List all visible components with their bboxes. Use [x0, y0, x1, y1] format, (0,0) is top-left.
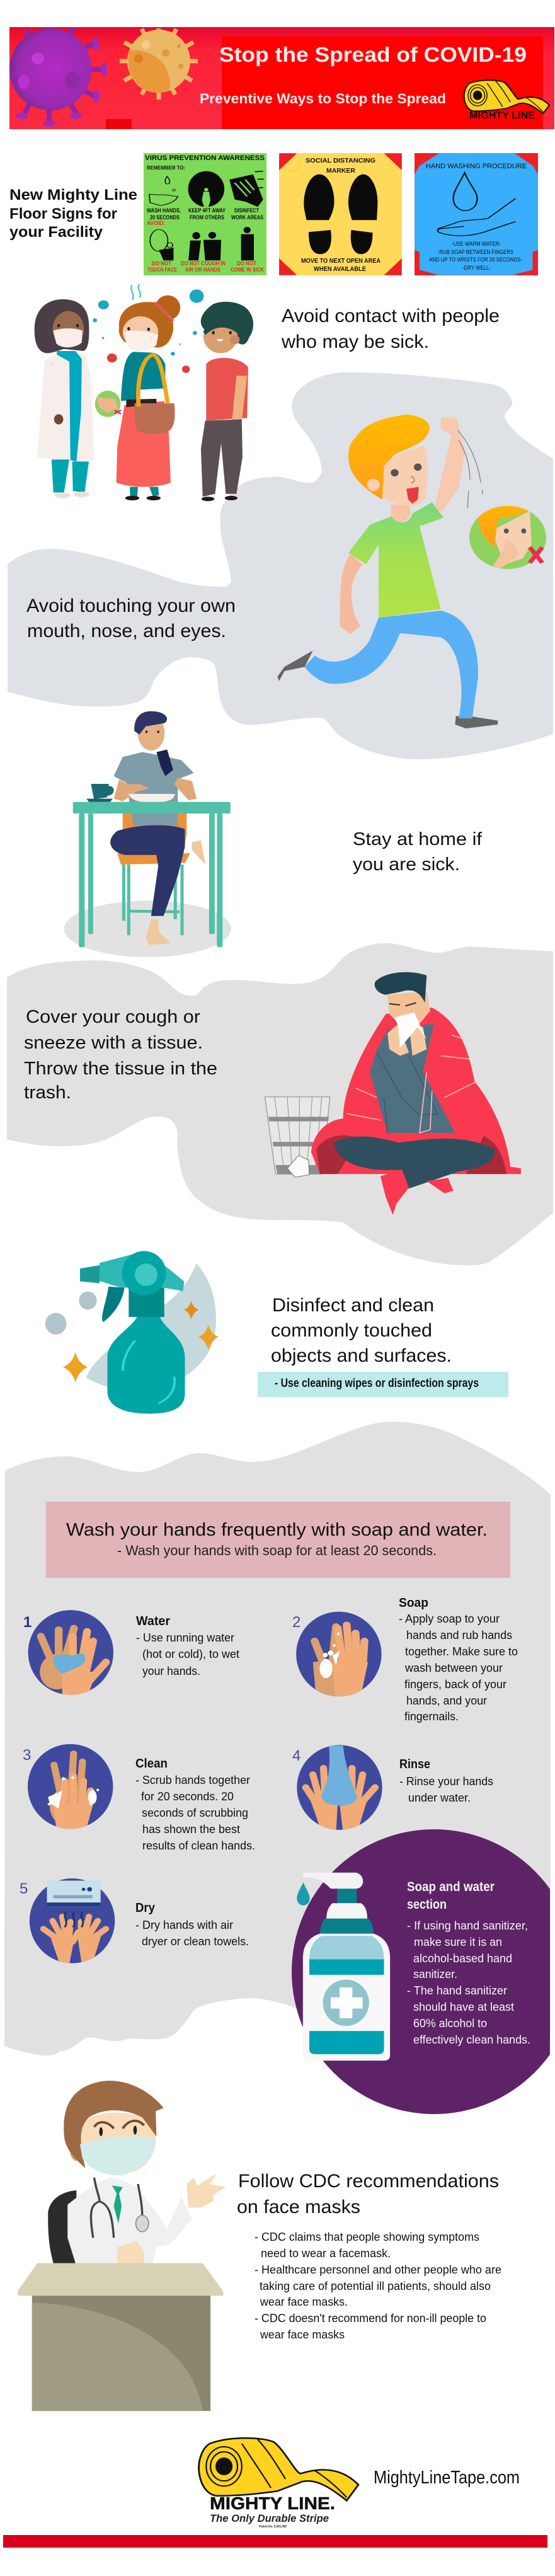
- text: avoid contact: who may be sick.: [281, 331, 429, 352]
- sign text: FROM OTHERS: [190, 214, 224, 221]
- text: disinfect and clean: Disinfect and clean: [272, 1295, 434, 1316]
- text: soap and water section: should have at least: [413, 2000, 514, 2013]
- hands: [50, 1754, 94, 1832]
- head: [122, 1251, 166, 1295]
- sign text: -RUB SOAP BETWEEN FINGERS: [438, 249, 513, 255]
- heading: floor signs: New Mighty Line: [9, 187, 137, 204]
- text: disinfect and clean: commonly touched: [271, 1320, 432, 1341]
- text: soap and water section: make sure it is an: [414, 1935, 502, 1948]
- callout text: - Use cleaning wipes or disinfection sprays: [275, 1377, 479, 1390]
- illustration: doctor at desk: [18, 2081, 226, 2411]
- footer red bar: [3, 2535, 547, 2548]
- icon: step 1 water: [28, 1610, 113, 1704]
- logo wordmark: MIGHTY LINE: [469, 110, 535, 121]
- stethoscope head: [136, 2216, 149, 2232]
- illustration: man at table: [64, 711, 231, 957]
- sign red text: TOUCH FACE: [147, 267, 177, 273]
- cap: [320, 1919, 374, 1935]
- title: Stop the Spread of COVID-19: [219, 43, 527, 66]
- sign background: [415, 153, 538, 275]
- text: step 2 soap: fingernails.: [404, 1710, 459, 1723]
- neck: [391, 502, 411, 522]
- chair: [48, 2190, 76, 2263]
- ear: [70, 2141, 83, 2161]
- sign text: DISINFECT: [234, 207, 259, 214]
- circle: [30, 1878, 115, 1964]
- fist: [117, 2241, 144, 2271]
- neck: [129, 1288, 164, 1317]
- shirt: [348, 502, 443, 618]
- blanket: [311, 1008, 521, 1174]
- heading: Wash your hands frequently with soap and water.: [66, 1520, 488, 1540]
- text: step 2 soap: [399, 1596, 518, 1723]
- head: [137, 715, 164, 750]
- bubbles: [45, 1292, 97, 1335]
- icon: step 3 clean: [28, 1744, 113, 1832]
- text: avoid contact: Avoid contact with people: [282, 306, 500, 326]
- legs: [110, 825, 185, 916]
- running water: [321, 1745, 357, 1806]
- icon: purple virus: [9, 25, 107, 127]
- sign icons: [149, 171, 264, 260]
- eyes: [146, 730, 159, 733]
- icon: sanitizer bottle: [297, 1873, 390, 2061]
- hands: [40, 1628, 106, 1704]
- nozzle: [100, 1251, 184, 1291]
- text: face mask details: wear face masks.: [260, 2295, 348, 2308]
- icon: step 4 rinse: [297, 1745, 382, 1832]
- doctor: [35, 299, 94, 498]
- text: soap and water section: Soap and water: [407, 1880, 495, 1894]
- text: step 1 water: - Use running water: [136, 1631, 234, 1644]
- circle: [297, 1745, 382, 1830]
- text: step 3 number: 3: [23, 1747, 31, 1764]
- eyes: [99, 2125, 137, 2136]
- hair: [348, 415, 430, 500]
- text: step 5 dry: dryer or clean towels.: [142, 1935, 249, 1948]
- sparkles: [63, 1301, 219, 1382]
- sign text: [301, 158, 380, 273]
- text: cover your cough: Throw the tissue in the: [24, 1059, 217, 1079]
- dryer base: [47, 1902, 101, 1906]
- text: step 4 rinse: [399, 1757, 493, 1804]
- hair: [375, 972, 426, 1003]
- panel: header banner: [9, 25, 554, 129]
- sign red text: COME IN SICK: [231, 267, 264, 273]
- text: step 2 soap: hands and rub hands: [406, 1628, 512, 1642]
- heading: floor signs: Floor Signs for: [9, 205, 117, 222]
- face: [387, 992, 430, 1027]
- panel: social distancing sign: [279, 153, 402, 275]
- text: face mask details: - CDC doesn't recommend for non-ill people to: [255, 2311, 486, 2325]
- text: step 5 dry: [135, 1901, 249, 1948]
- text: step 2 soap: - Apply soap to your: [399, 1612, 500, 1625]
- virus particles: [93, 284, 203, 373]
- feet: [146, 841, 205, 945]
- sign text: REMEMBER TO:: [147, 165, 185, 171]
- warm air: [65, 1912, 83, 1927]
- text: soap and water section: 60% alcohol to: [413, 2016, 487, 2030]
- hands: [306, 1768, 375, 1832]
- stem: [337, 1887, 357, 1904]
- text: step 3 clean: [135, 1757, 255, 1852]
- text: face mask details: wear face masks: [260, 2328, 345, 2341]
- icon: tape roll logo: [464, 80, 549, 113]
- water: [54, 1653, 86, 1674]
- illustration: spray bottle: [45, 1251, 219, 1413]
- panel: touching face background blob: [8, 372, 553, 759]
- text: face mask details: [255, 2230, 501, 2341]
- face: [80, 2112, 156, 2171]
- stethoscope: [91, 2178, 142, 2238]
- air dryer: [47, 1880, 101, 1906]
- text: avoid touching: Avoid touching your own: [26, 595, 236, 616]
- text: cover your cough: Cover your cough or: [26, 1007, 200, 1027]
- tagline: The Only Durable Stripe: [210, 2512, 329, 2524]
- small red block: [106, 119, 132, 129]
- text: soap and water section: alcohol-based hand: [413, 1952, 512, 1965]
- text: step 5 number: 5: [20, 1880, 28, 1897]
- head highlight: [135, 1263, 157, 1286]
- raised hand: [186, 2173, 226, 2208]
- text: step 3 clean: has shown the best: [142, 1822, 240, 1836]
- sign text: MOVE TO NEXT OPEN AREA: [301, 258, 380, 265]
- sign text: [426, 163, 527, 271]
- header background: [9, 27, 554, 129]
- icon: touching face circle: [469, 505, 546, 569]
- text: step 3 clean: seconds of scrubbing: [142, 1806, 248, 1819]
- red corners and footprints: [279, 153, 402, 275]
- heading box: [46, 1502, 510, 1578]
- text: step 2 soap: together. Make sure to: [405, 1645, 518, 1658]
- circle: [28, 1744, 113, 1829]
- text: step 2 soap: hands, and your: [406, 1694, 487, 1707]
- tie: [112, 2185, 123, 2224]
- circle: [296, 1612, 382, 1696]
- desk body: [32, 2296, 210, 2411]
- text: follow CDC recommendations: [237, 2171, 499, 2217]
- text: step 4 rinse: under water.: [408, 1791, 471, 1804]
- face: [379, 446, 428, 506]
- panel: wash hands heading: [46, 1502, 510, 1578]
- sign red text: [147, 220, 264, 273]
- table: [73, 802, 231, 947]
- socks: [380, 1170, 454, 1215]
- pump head: [303, 1873, 363, 1889]
- backdrop crescent: [86, 1263, 216, 1396]
- sign text: WASH HANDS,: [147, 207, 181, 214]
- hands: [313, 1625, 368, 1704]
- text: step 1 water: Water: [136, 1614, 170, 1628]
- sign red text: DO NOT: [237, 260, 256, 267]
- foam: [48, 1776, 99, 1808]
- panel: virus prevention sign: [144, 153, 266, 275]
- text: stay at home: Stay at home if: [353, 829, 483, 849]
- text: avoid touching: mouth, nose, and eyes.: [27, 621, 226, 641]
- text: soap and water section: [407, 1880, 530, 2046]
- sign text: AND UP TO WRISTS FOR 20 SECONDS-: [429, 256, 522, 263]
- text: step 1 water: (hot or cold), to wet: [142, 1647, 239, 1660]
- wordmark: MIGHTY LINE.: [210, 2493, 335, 2513]
- arm raised: [434, 418, 465, 511]
- panel: hand washing sign: [415, 153, 538, 275]
- chair: [117, 812, 190, 865]
- sign background: [279, 153, 402, 275]
- sign text: -USE WARM WATER-: [452, 241, 501, 247]
- sign background: [144, 153, 266, 275]
- text: step 1 number: 1: [23, 1614, 31, 1631]
- top band: [309, 1959, 384, 1975]
- heading: floor signs: [9, 187, 137, 241]
- text: step 3 clean: - Scrub hands together: [135, 1773, 250, 1786]
- text: step 4 number: 4: [292, 1747, 300, 1764]
- text: follow CDC recommendations: on face masks: [237, 2197, 360, 2217]
- dryer slot: [54, 1895, 93, 1899]
- sign text: -DRY WELL-: [462, 265, 491, 271]
- icon: orange virus: [120, 28, 198, 100]
- waste bin: [265, 1097, 330, 1177]
- logo: Mighty Line footer: [199, 2438, 358, 2529]
- cap: [80, 1265, 100, 1283]
- text: website: MightyLineTape.com: [374, 2468, 520, 2488]
- panel: sanitizer purple circle: [292, 1829, 555, 2114]
- text: soap and water section: - If using hand sanitizer,: [407, 1919, 528, 1932]
- text: face mask details: need to wear a facemask.: [261, 2246, 391, 2260]
- sign text: HAND WASHING PROCEDURE: [426, 163, 527, 170]
- tissue: [394, 1013, 426, 1048]
- text: cover your cough: sneeze with a tissue.: [24, 1033, 203, 1053]
- blanket stripes: [346, 1035, 476, 1133]
- text: face mask details: - CDC claims that people showing symptoms: [255, 2230, 479, 2243]
- icon: step 2 soap: [296, 1612, 382, 1704]
- bottle body: [303, 1934, 390, 2061]
- hair: [64, 2081, 164, 2168]
- body: [107, 1317, 185, 1413]
- text: avoid contact: [281, 306, 500, 352]
- sign text: WORK AREAS: [231, 214, 263, 221]
- sign text: MARKER: [326, 168, 356, 175]
- panel: cover cough background blob: [7, 943, 553, 1265]
- sign text: WHEN AVAILABLE: [314, 266, 366, 273]
- trousers: [305, 611, 478, 718]
- bowl: [129, 794, 175, 803]
- soap foam: [319, 1633, 340, 1678]
- bottom band: [309, 2031, 384, 2054]
- coat: [67, 2178, 192, 2270]
- text: step 3 clean: results of clean hands.: [142, 1839, 255, 1852]
- text: cover your cough: [24, 1007, 217, 1103]
- text: cover your cough: trash.: [24, 1083, 71, 1103]
- coffee cup: [91, 785, 113, 799]
- text: soap and water section: effectively clean hands.: [413, 2033, 530, 2046]
- icon: tape roll: [199, 2438, 358, 2500]
- trigger: [102, 1287, 125, 1322]
- text: stay at home: you are sick.: [353, 854, 460, 875]
- mask: [80, 2136, 155, 2175]
- sign red text: DO NOT COUGH IN: [181, 260, 226, 267]
- trousers: [335, 1137, 495, 1189]
- sign text: KEEP 4FT AWAY: [188, 207, 226, 214]
- panel: hand washing background blob: [4, 1422, 551, 2056]
- sign red text: DO NOT: [152, 260, 171, 267]
- text: step 5 dry: Dry: [135, 1901, 156, 1915]
- label cross circle: [323, 1980, 369, 2026]
- torso: [114, 752, 194, 826]
- text: step 2 soap: wash between your: [404, 1661, 503, 1674]
- subtitle: Preventive Ways to Stop the Spread: [200, 91, 446, 106]
- sign red text: AVOID:: [147, 220, 165, 226]
- text: soap and water section: - The hand sanitizer: [407, 1984, 507, 1997]
- saucer: [86, 799, 113, 802]
- eyebrows: [94, 2121, 144, 2129]
- text: step 3 clean: Clean: [135, 1757, 168, 1771]
- desk panel: [32, 2303, 203, 2411]
- sub-heading: - Wash your hands with soap for at least 20 seconds.: [117, 1543, 437, 1558]
- hands: [43, 1917, 106, 1964]
- floor shadow: [64, 900, 231, 957]
- illustration: sick man with blanket: [265, 972, 521, 1215]
- sign text: [145, 154, 265, 221]
- text: disinfect and clean: objects and surfaces.: [271, 1345, 452, 1366]
- text: step 4 rinse: Rinse: [399, 1757, 430, 1771]
- drop: [297, 1882, 310, 1906]
- sign text: VIRUS PREVENTION AWARENESS: [145, 154, 265, 162]
- text: step 2 number: 2: [292, 1614, 300, 1631]
- callout: cleaning wipes: [258, 1372, 508, 1397]
- sign text: SOCIAL DISTANCING: [306, 158, 375, 164]
- text: follow CDC recommendations: Follow CDC recommendations: [238, 2171, 499, 2192]
- blanket shade: [316, 1136, 506, 1174]
- text: soap and water section: section: [407, 1897, 447, 1912]
- liquid window: [309, 1936, 384, 1959]
- text: step 1 water: your hands.: [142, 1664, 200, 1677]
- man in red shirt: [201, 302, 253, 501]
- text: disinfect and clean: [271, 1295, 452, 1366]
- sweater: [370, 1023, 455, 1133]
- callout box: [258, 1372, 508, 1397]
- text: step 3 clean: for 20 seconds. 20: [141, 1790, 234, 1803]
- icon: step 5 dry: [30, 1878, 115, 1964]
- motion lines: [458, 430, 483, 508]
- desk top: [18, 2263, 223, 2296]
- closed eyes: [389, 1003, 416, 1006]
- text: step 2 soap: Soap: [399, 1596, 428, 1610]
- sweater creases: [377, 1052, 437, 1133]
- bottle highlights: [123, 1340, 175, 1403]
- illustration: three people with masks: [35, 284, 253, 501]
- icon: handshake circle: [95, 391, 121, 417]
- rear shoe: [277, 650, 313, 681]
- text: step 2 soap: fingers, back of your: [404, 1677, 506, 1691]
- label cross: [331, 1987, 363, 2018]
- text: face mask details: - Healthcare personnel and other people who are: [255, 2263, 501, 2276]
- text: avoid touching: [26, 595, 236, 641]
- chair legs: [123, 865, 182, 935]
- woman: [117, 296, 180, 500]
- front shoe: [455, 716, 498, 728]
- phone: [156, 749, 173, 776]
- illustration: running boy: [277, 415, 546, 728]
- text: step 1 water: [136, 1614, 239, 1677]
- text: face mask details: taking care of potential ill patients, should also: [260, 2279, 491, 2292]
- eyes and mouth: [391, 464, 421, 503]
- blue field and water drop: [415, 153, 538, 275]
- header red panel: [222, 37, 543, 129]
- sign text: 20 SECONDS: [150, 214, 180, 221]
- text: step 5 dry: - Dry hands with air: [135, 1918, 233, 1931]
- hands: [387, 1023, 426, 1056]
- text: soap and water section: sanitizer.: [413, 1967, 457, 1981]
- circle: [28, 1610, 113, 1695]
- hair: [134, 711, 167, 735]
- ear: [367, 479, 380, 491]
- collar: [326, 1903, 367, 1919]
- text: step 4 rinse: - Rinse your hands: [399, 1774, 493, 1788]
- left arm: [340, 555, 363, 634]
- text: stay at home: [353, 829, 483, 875]
- sign red text: AIR OR HANDS: [185, 267, 220, 273]
- heading: floor signs: your Facility: [9, 224, 103, 241]
- arms: [114, 778, 197, 802]
- patent note: Patent No. 5,081,480: [259, 2525, 287, 2529]
- dryer lights: [82, 1887, 92, 1892]
